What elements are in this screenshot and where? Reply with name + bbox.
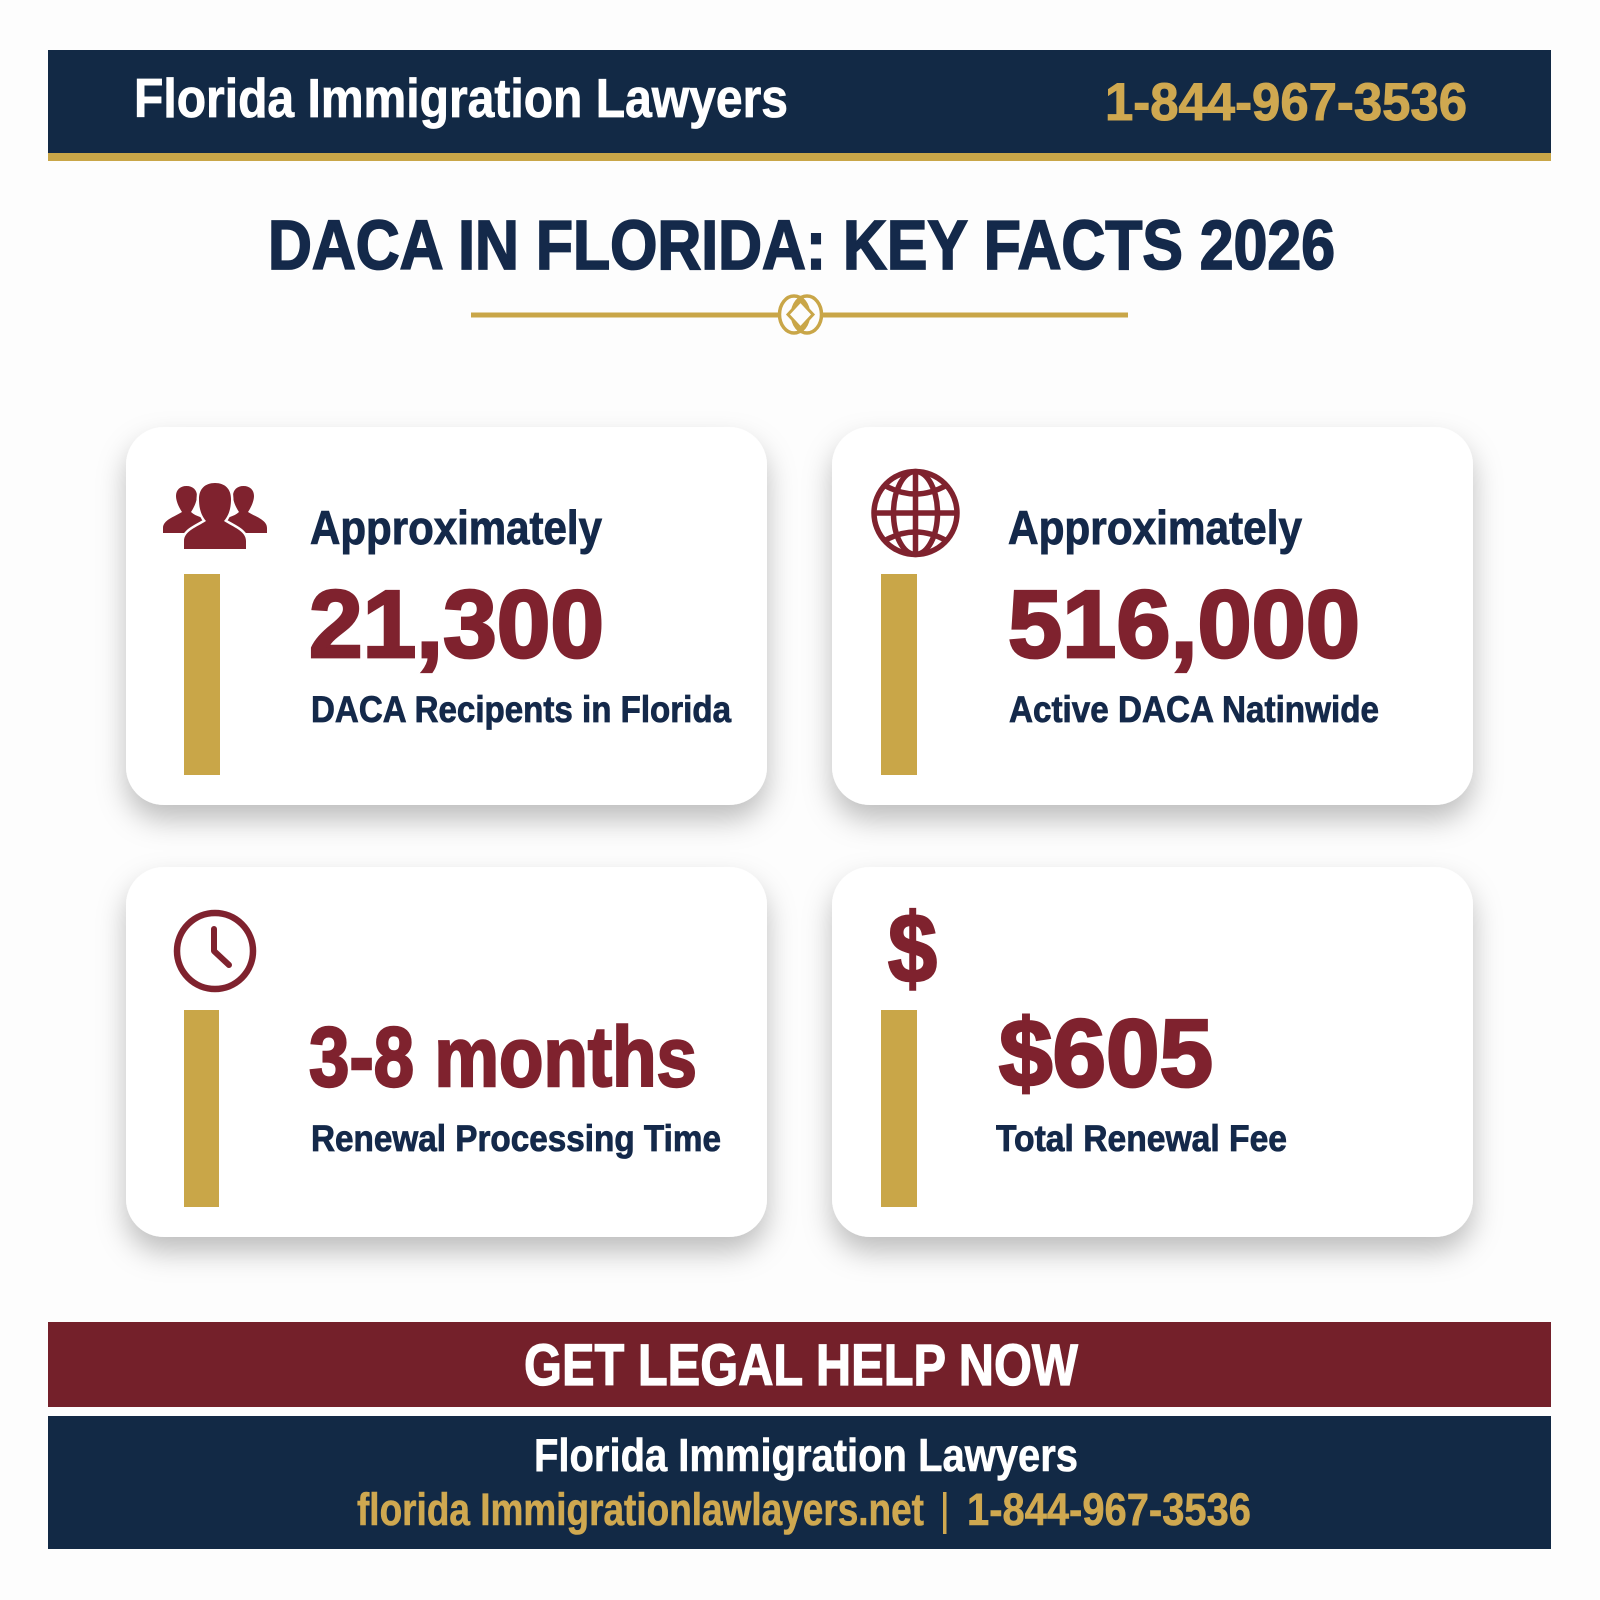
lead-in text: Approximately [1008, 501, 1302, 554]
title divider with ornament [471, 296, 1128, 333]
icon: globe [874, 471, 957, 555]
stat: 516,000: 516,000 [1008, 571, 1360, 678]
stat caption: Active DACA Natinwide [1009, 689, 1379, 730]
panel: total renewal fee [832, 867, 1473, 1237]
icon: clock [177, 913, 253, 989]
stat: 3-8 months: 3-8 months [309, 1010, 697, 1104]
stat caption: Renewal Processing Time [311, 1118, 721, 1159]
header bar [48, 50, 1551, 161]
icon: dollar sign: $ [888, 893, 937, 1003]
gold accent bar [184, 574, 220, 775]
panel: DACA recipients in Florida [126, 427, 767, 805]
footer website and phone: florida Immigrationlawlayers.net [357, 1484, 924, 1535]
header firm name: Florida Immigration Lawyers [134, 67, 788, 129]
gold accent bar [184, 1010, 219, 1207]
stat: $605: $605 [999, 1000, 1213, 1107]
stat caption: DACA Recipents in Florida [311, 689, 731, 730]
call-to-action text: GET LEGAL HELP NOW [524, 1333, 1078, 1398]
lead-in text: Approximately [310, 501, 602, 554]
icon: three people [163, 483, 267, 549]
gold accent bar [881, 1010, 917, 1207]
footer contact bar [48, 1416, 1551, 1549]
gold accent bar [881, 574, 917, 775]
panel: active DACA nationwide [832, 427, 1473, 805]
panel: renewal processing time [126, 867, 767, 1237]
call-to-action banner [48, 1322, 1551, 1407]
stat: 21,300: 21,300 [309, 571, 604, 678]
header phone number: 1-844-967-3536 [1105, 73, 1467, 132]
footer website and phone: 1-844-967-3536 [967, 1484, 1251, 1535]
title: DACA IN FLORIDA: KEY FACTS 2026 [268, 206, 1335, 284]
stat caption: Total Renewal Fee [996, 1118, 1287, 1159]
footer firm name: Florida Immigration Lawyers [534, 1429, 1078, 1481]
